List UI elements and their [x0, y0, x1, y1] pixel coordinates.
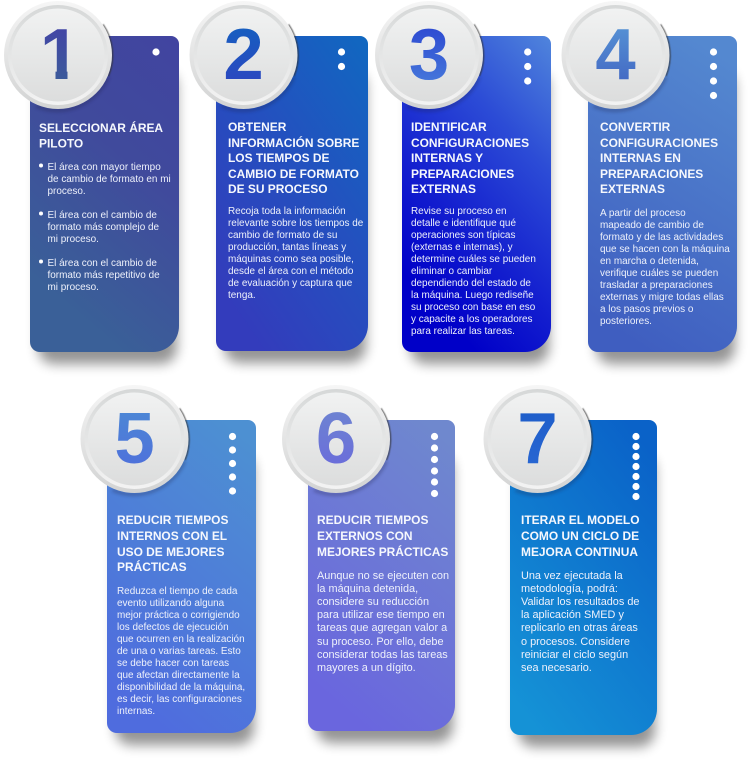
body text 7: metodología, podrá:: [521, 583, 618, 595]
body text 4: formato y de las actividades: [600, 232, 723, 243]
card background 2: [216, 36, 368, 351]
heading 2: INFORMACIÓN SOBRE: [228, 135, 359, 150]
card background 3: [402, 36, 551, 352]
heading 4: CONVERTIR: [600, 120, 671, 134]
body text 2: relevante sobre los tiempos de: [228, 218, 364, 229]
card background 1: [30, 36, 179, 352]
heading 2: DE SU PROCESO: [228, 182, 328, 196]
number badge 4: [562, 1, 670, 110]
heading 4: [600, 120, 718, 196]
body text 2: producción, tantas líneas y: [228, 242, 346, 253]
body text 3: Revise su proceso en: [411, 206, 507, 217]
body text 4: mapeado de cambio de: [600, 220, 704, 231]
number badge 4: 4: [595, 14, 636, 95]
body text 3: [411, 206, 536, 337]
body text 4: externas y migre todas ellas: [600, 292, 724, 303]
heading 7: [521, 513, 640, 559]
card shadow 4: [596, 70, 735, 364]
body text 2: cambio de formato de su: [228, 230, 337, 241]
body text 2: de evaluación y captura que: [228, 278, 353, 289]
body text 4: posteriores.: [600, 316, 652, 327]
body text 5: que ocurren en la realización: [117, 634, 245, 645]
card background 7: [510, 420, 657, 735]
body text 5: de una o varias tareas. Esto: [117, 646, 241, 657]
body text 6: considerar todas las tareas: [317, 649, 448, 661]
number badge 6: [282, 385, 391, 494]
number badge 3: 3: [409, 14, 449, 95]
body text 7: Validar los resultados de: [521, 596, 639, 608]
progress dots 7: [632, 433, 640, 500]
body text 5: los defectos de ejecución: [117, 622, 229, 633]
body text 5: es decir, las configuraciones: [117, 694, 242, 705]
heading 1: SELECCIONAR ÁREA: [39, 120, 163, 135]
panel: step 7: [484, 385, 657, 747]
body text 7: reiniciar el ciclo según: [521, 649, 628, 661]
bullet list 1: [39, 162, 171, 293]
heading 3: CONFIGURACIONES: [411, 136, 529, 150]
panel: step 3: [375, 1, 551, 364]
body text 7: replicarlo en otras áreas: [521, 622, 638, 634]
progress dots 5: [229, 433, 236, 495]
bullet list 1: proceso.: [48, 186, 86, 197]
progress dots 4: [710, 48, 717, 99]
heading 2: OBTENER: [228, 120, 287, 134]
heading 3: INTERNAS Y: [411, 151, 483, 165]
body text 5: que afectan directamente la: [117, 670, 240, 681]
heading 2: LOS TIEMPOS DE: [228, 151, 330, 165]
heading 7: MEJORA CONTINUA: [521, 545, 638, 559]
bullet list 1: de cambio de formato en mi: [48, 174, 171, 185]
number badge 1: [4, 1, 113, 110]
body text 7: Una vez ejecutada la: [521, 570, 624, 582]
body text 3: su proceso con base en eso: [411, 302, 536, 313]
body text 3: la máquina. Luego rediseñe: [411, 290, 534, 301]
number badge 3: [375, 1, 484, 110]
panel: step 1: [4, 1, 179, 364]
heading 2: [228, 120, 359, 196]
body text 2: [228, 206, 364, 301]
heading 3: IDENTIFICAR: [411, 120, 487, 134]
body text 6: [317, 570, 449, 674]
card shadow 6: [316, 454, 453, 743]
heading 5: INTERNOS CON EL: [117, 529, 227, 543]
body text 3: para realizar las tareas.: [411, 326, 515, 337]
body text 5: Reduzca el tiempo de cada: [117, 586, 238, 597]
number badge 2: [190, 1, 298, 110]
number badge 5: [80, 385, 189, 494]
bullet list 1: El área con el cambio de: [48, 210, 157, 221]
number badge 1: 1: [40, 14, 80, 95]
card background 4: [588, 36, 737, 352]
bullet list 1: mi proceso.: [48, 282, 99, 293]
heading 5: PRÁCTICAS: [117, 559, 187, 574]
card shadow 2: [224, 70, 366, 363]
heading 6: [317, 513, 448, 559]
card shadow 3: [410, 70, 549, 364]
number badge 2: 2: [223, 14, 264, 95]
body text 2: desde el área con el método: [228, 266, 354, 277]
heading 4: CONFIGURACIONES: [600, 136, 718, 150]
number badge 6: 6: [316, 398, 356, 479]
body text 6: considere su reducción: [317, 596, 429, 608]
number badge 7: 7: [517, 398, 558, 479]
progress dots 1: [152, 48, 160, 56]
heading 3: PREPARACIONES: [411, 167, 514, 181]
body text 6: mayores a un dígito.: [317, 662, 416, 674]
heading 5: [117, 513, 228, 574]
bullet list 1: El área con el cambio de: [48, 258, 157, 269]
body text 4: que se hacen con la máquina: [600, 244, 730, 255]
body text 7: la aplicación SMED y: [521, 609, 624, 621]
body text 4: verifique cuáles se pueden: [600, 268, 718, 279]
body text 5: mejor práctica o corrigiendo: [117, 610, 240, 621]
card shadow 5: [115, 454, 254, 745]
body text 6: tareas que agregan valor a: [317, 622, 448, 634]
card shadow 7: [518, 454, 655, 747]
progress dots 2: [338, 48, 345, 70]
body text 6: la máquina detenida,: [317, 583, 418, 595]
body text 7: o procesos. Considere: [521, 636, 630, 648]
heading 3: [411, 120, 529, 196]
panel: step 6: [282, 385, 455, 743]
bullet list 1: formato más repetitivo de: [48, 270, 160, 281]
body text 5: disponibilidad de la máquina,: [117, 682, 245, 693]
heading 2: CAMBIO DE FORMATO: [228, 167, 359, 181]
panel: step 4: [562, 1, 737, 364]
bullet list 1: formato más complejo de: [48, 222, 160, 233]
bullet list 1: El área con mayor tiempo: [48, 162, 161, 173]
heading 6: EXTERNOS CON: [317, 529, 413, 543]
body text 7: [521, 570, 639, 674]
body text 7: sea necesario.: [521, 662, 592, 674]
bullet list 1: mi proceso.: [48, 234, 99, 245]
body text 5: [117, 586, 245, 717]
heading 1: PILOTO: [39, 136, 83, 150]
body text 2: máquinas como sea posible,: [228, 254, 354, 265]
number badge 5: 5: [114, 398, 155, 479]
body text 4: a los pasos previos o: [600, 304, 694, 315]
body text 4: [600, 208, 730, 327]
body text 3: y capacite a los operadores: [411, 314, 533, 325]
body text 5: internas.: [117, 706, 155, 717]
body text 6: su proceso. Por ello, debe: [317, 636, 444, 648]
body text 4: en marcha o detenida,: [600, 256, 699, 267]
number badge 7: [484, 385, 592, 494]
card shadow 1: [38, 70, 177, 364]
heading 3: EXTERNAS: [411, 182, 476, 196]
progress dots 3: [524, 48, 531, 85]
body text 4: trasladar a preparaciones: [600, 280, 713, 291]
panel: step 5: [80, 385, 256, 745]
heading 7: ITERAR EL MODELO: [521, 513, 640, 527]
body text 3: (externas e internas), y: [411, 242, 513, 253]
body text 3: operaciones son típicas: [411, 230, 515, 241]
body text 2: Recoja toda la información: [228, 206, 346, 217]
heading 6: REDUCIR TIEMPOS: [317, 513, 428, 527]
heading 4: INTERNAS EN: [600, 151, 681, 165]
heading 4: PREPARACIONES: [600, 167, 703, 181]
card background 5: [107, 420, 256, 733]
body text 4: A partir del proceso: [600, 208, 686, 219]
heading 5: REDUCIR TIEMPOS: [117, 513, 228, 527]
card background 6: [308, 420, 455, 731]
body text 6: Aunque no se ejecuten con: [317, 570, 449, 582]
panel: step 2: [190, 1, 368, 363]
heading 6: MEJORES PRÁCTICAS: [317, 544, 448, 559]
body text 3: eliminar o cambiar: [411, 266, 493, 277]
heading 4: EXTERNAS: [600, 182, 665, 196]
heading 1: [39, 120, 163, 150]
body text 3: detalle e identifique qué: [411, 218, 516, 229]
body text 6: para utilizar ese tiempo en: [317, 609, 445, 621]
body text 3: dependiendo del estado de: [411, 278, 531, 289]
body text 2: tenga.: [228, 290, 256, 301]
heading 7: COMO UN CICLO DE: [521, 529, 639, 543]
body text 5: se debe hacer con tareas: [117, 658, 229, 669]
progress dots 6: [431, 433, 438, 497]
body text 3: determine cuáles se pueden: [411, 254, 536, 265]
heading 5: USO DE MEJORES: [117, 545, 224, 559]
body text 5: evento utilizando alguna: [117, 598, 225, 609]
